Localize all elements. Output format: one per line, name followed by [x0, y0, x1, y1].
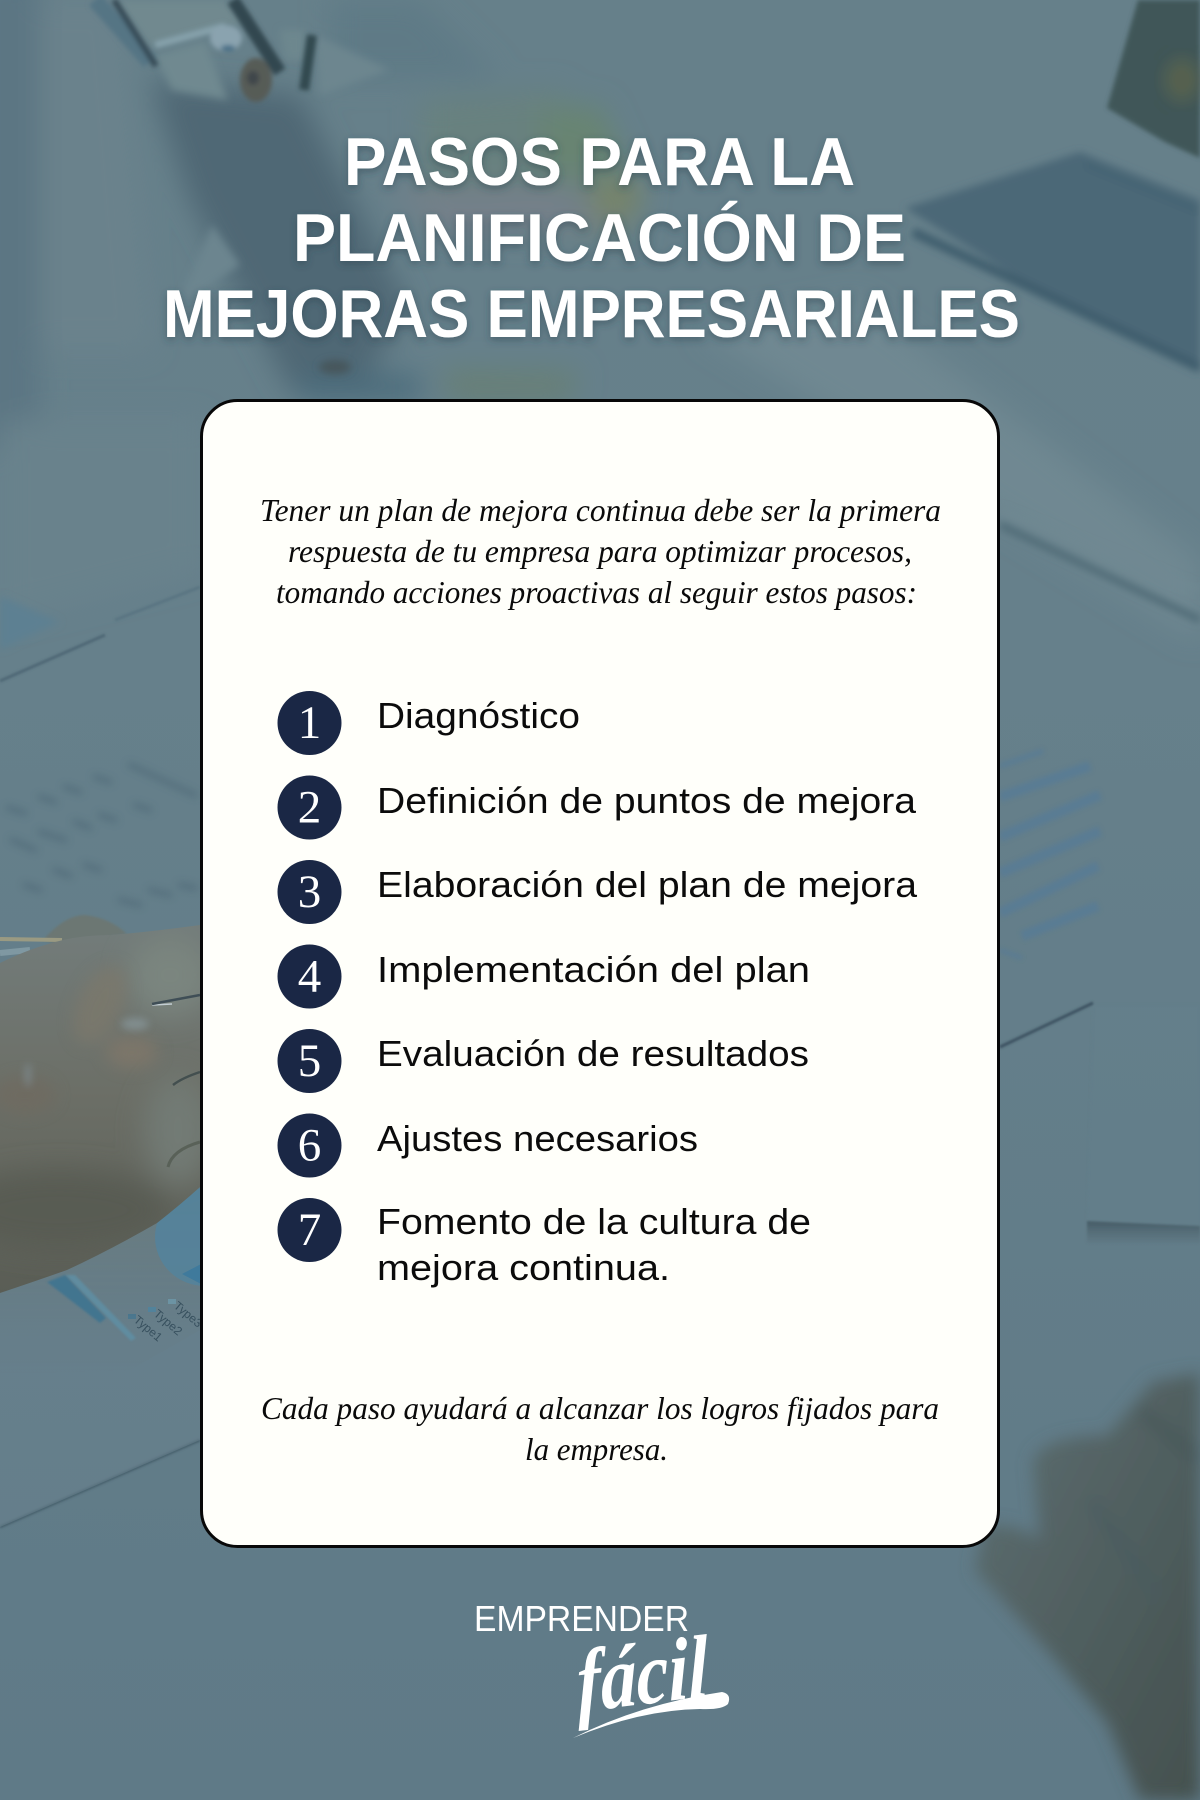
table dots on paper — [8, 765, 195, 905]
step 7: Fomento de la cultura de — [377, 1201, 811, 1242]
step 6 — [278, 1114, 698, 1178]
title: PLANIFICACIÓN DE — [293, 200, 906, 276]
closing text: la empresa. — [525, 1431, 668, 1467]
laptop screen — [1107, 0, 1200, 158]
title — [163, 124, 1020, 352]
step 4: 4 — [298, 950, 321, 1002]
step 1 — [278, 691, 580, 755]
intro text: tomando acciones proactivas al seguir estos pasos: — [276, 574, 917, 610]
step 6: 6 — [298, 1120, 321, 1172]
closing text — [261, 1390, 939, 1467]
step 1: Diagnóstico — [377, 695, 580, 736]
step 2: Definición de puntos de mejora — [377, 780, 917, 821]
step 3: 3 — [298, 866, 321, 918]
intro text: respuesta de tu empresa para optimizar procesos, — [288, 533, 912, 569]
step 5 — [278, 1029, 809, 1093]
step 5: 5 — [298, 1035, 321, 1087]
desk paper edges — [0, 587, 1200, 1527]
step 3 — [278, 860, 918, 924]
step 1: 1 — [298, 697, 321, 749]
left hand — [0, 915, 212, 1305]
step 2 — [278, 776, 917, 840]
logo: Emprender fácil: fácil — [575, 1616, 710, 1731]
step 7 — [278, 1198, 811, 1288]
paper under left hand — [0, 1190, 200, 1527]
title: MEJORAS EMPRESARIALES — [163, 276, 1020, 352]
closing text: Cada paso ayudará a alcanzar los logros fijados para — [261, 1390, 939, 1426]
step 4: Implementación del plan — [377, 949, 810, 990]
title: PASOS PARA LA — [344, 124, 855, 200]
step 7: 7 — [298, 1204, 321, 1256]
pie and bar on paper: Type1 — [131, 1313, 165, 1345]
step 6: Ajustes necesarios — [377, 1118, 698, 1159]
tan shadow below hand — [0, 1200, 200, 1375]
pie and bar on paper — [47, 1188, 255, 1345]
step 5: Evaluación de resultados — [377, 1033, 809, 1074]
logo: Emprender fácil — [474, 1598, 729, 1738]
pie and bar on paper: Type2 — [151, 1307, 185, 1339]
step 7: mejora continua. — [377, 1247, 670, 1288]
intro text: Tener un plan de mejora continua debe ser la primera — [260, 492, 941, 528]
intro text — [260, 492, 941, 610]
chart stripes on paper — [1000, 751, 1100, 958]
pie and bar on paper: Type3 — [171, 1299, 205, 1331]
step 3: Elaboración del plan de mejora — [377, 864, 918, 905]
laptop keyboard — [905, 152, 1200, 372]
right hand — [975, 1373, 1200, 1800]
step 4 — [278, 944, 810, 1008]
logo: Emprender fácil: EMPRENDER — [474, 1598, 689, 1639]
panel: steps card — [202, 400, 998, 1546]
step 2: 2 — [298, 782, 321, 834]
